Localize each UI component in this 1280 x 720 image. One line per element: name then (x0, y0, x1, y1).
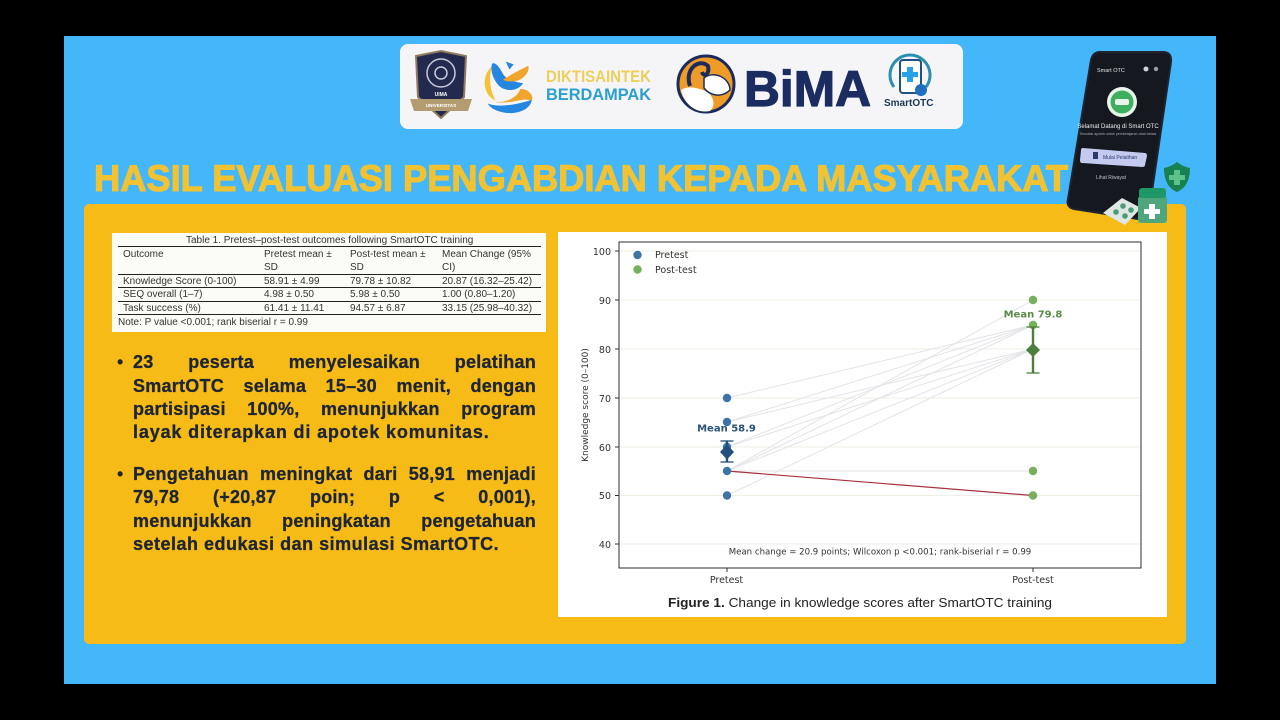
y axis ticks and labels: 50 (599, 491, 611, 502)
logo: university crest: UIMA (435, 92, 448, 98)
logo: university crest: UNIVERSITAS (426, 103, 456, 108)
logo text: smartotc: SmartOTC (884, 98, 933, 109)
table note: Note: P value <0.001; rank biserial r = 0.99 (118, 317, 308, 328)
text: 5.98 ± 0.50 (350, 289, 400, 300)
x axis labels: Post-test (1012, 575, 1054, 586)
medicine bottle (1138, 188, 1167, 223)
text: 33.15 (25.98–40.32) (442, 303, 532, 314)
blister pack (1103, 198, 1141, 225)
title: HASIL EVALUASI PENGABDIAN KEPADA MASYARAKAT (94, 158, 1068, 199)
bullet text: participation (117, 352, 536, 442)
text: 58.91 ± 4.99 (264, 276, 320, 287)
text: layak diterapkan di apotek komunitas. (133, 422, 490, 442)
text: menunjukkan peningkatan pengetahuan (133, 511, 536, 531)
bullet text: knowledge gain (117, 464, 536, 554)
x axis labels (710, 568, 1054, 586)
phone body (1068, 52, 1171, 219)
paired participant lines (727, 300, 1033, 496)
text: 94.57 ± 6.87 (350, 303, 406, 314)
text: 61.41 ± 11.41 (264, 303, 324, 314)
chart panel: Mean 79.8 (1004, 310, 1062, 320)
post-test points (1029, 296, 1037, 500)
text: Pengetahuan meningkat dari 58,91 menjadi (133, 464, 536, 484)
phone body: Selamat Datang di Smart OTC (1077, 124, 1159, 130)
y axis ticks and labels: 90 (599, 296, 611, 307)
pretest points (723, 394, 731, 500)
text: Pretest mean ± (264, 249, 332, 260)
y axis ticks and labels: 80 (599, 345, 611, 356)
shield (1164, 162, 1190, 192)
text: SmartOTC selama 15–30 menit, dengan (133, 376, 536, 396)
logo bar (400, 44, 963, 129)
mean labels: Mean 58.9 (697, 424, 756, 434)
text: 20.87 (16.32–25.42) (442, 276, 532, 287)
phone body: Lihat Riwayat (1096, 175, 1127, 181)
text: 23 peserta menyelesaikan pelatihan (133, 352, 536, 372)
text: • (117, 464, 123, 484)
text: Post-test mean ± (350, 249, 426, 260)
text: • (117, 352, 123, 372)
stats annotation: Mean change = 20.9 points; Wilcoxon p <0.001; rank-biserial r = 0.99 (729, 548, 1031, 558)
declining participant line (727, 471, 1033, 496)
phone body: Smart OTC (1097, 68, 1125, 74)
logo: university crest (410, 50, 472, 119)
table title: Table 1. Pretest–post-test outcomes following SmartOTC training (186, 235, 473, 246)
yellow content panel (84, 204, 1186, 644)
logo text: diktisaintek berdampak (546, 67, 652, 104)
text: setelah edukasi dan simulasi SmartOTC. (133, 534, 499, 554)
phone illustration with medicine (1066, 51, 1190, 225)
text: Task success (%) (123, 303, 201, 314)
text: SD (264, 262, 278, 273)
text: Mean Change (95% (442, 249, 531, 260)
text: 79,78 (+20,87 poin; p < 0,001), (133, 487, 536, 507)
y axis ticks and labels: 70 (599, 394, 611, 405)
text: 4.98 ± 0.50 (264, 289, 314, 300)
phone body: Mulai Pelatihan (1103, 155, 1137, 161)
y axis ticks and labels: 100 (593, 247, 611, 258)
legend: Pretest (655, 250, 689, 261)
text: SD (350, 262, 364, 273)
y axis ticks and labels: 60 (599, 443, 611, 454)
logo: smartotc phone (888, 54, 932, 96)
figure caption: Figure 1. Change in knowledge scores after SmartOTC training (668, 595, 1052, 610)
x axis labels: Pretest (710, 575, 743, 586)
legend: Post-test (655, 265, 697, 276)
y axis ticks and labels (593, 247, 619, 551)
text: 1.00 (0.80–1.20) (442, 289, 515, 300)
post-test mean marker (1026, 327, 1040, 373)
text: 79.78 ± 10.82 (350, 276, 411, 287)
table header (123, 249, 531, 273)
axes frame (619, 242, 1141, 568)
phone body: Simulasi apotek untuk pembelajaran obat bebas (1080, 132, 1157, 136)
logo: diktisaintek swoosh (484, 62, 532, 114)
y axis title: Knowledge score (0–100) (581, 348, 591, 462)
pretest mean marker (720, 441, 734, 462)
legend (633, 250, 697, 276)
text: Outcome (123, 249, 164, 260)
text: Knowledge Score (0-100) (123, 276, 236, 287)
logo: bima mascot (676, 54, 736, 114)
table row: seq overall (123, 289, 515, 300)
y axis ticks and labels: 40 (599, 540, 611, 551)
table panel (112, 233, 546, 332)
text: partisipasi 100%, menunjukkan program (133, 399, 536, 419)
text: SEQ overall (1–7) (123, 289, 202, 300)
chart panel (558, 232, 1167, 617)
table row: knowledge score (123, 276, 532, 287)
table row: task success (123, 303, 532, 314)
logo text: diktisaintek berdampak: BERDAMPAK (546, 85, 652, 104)
text: CI) (442, 262, 455, 273)
